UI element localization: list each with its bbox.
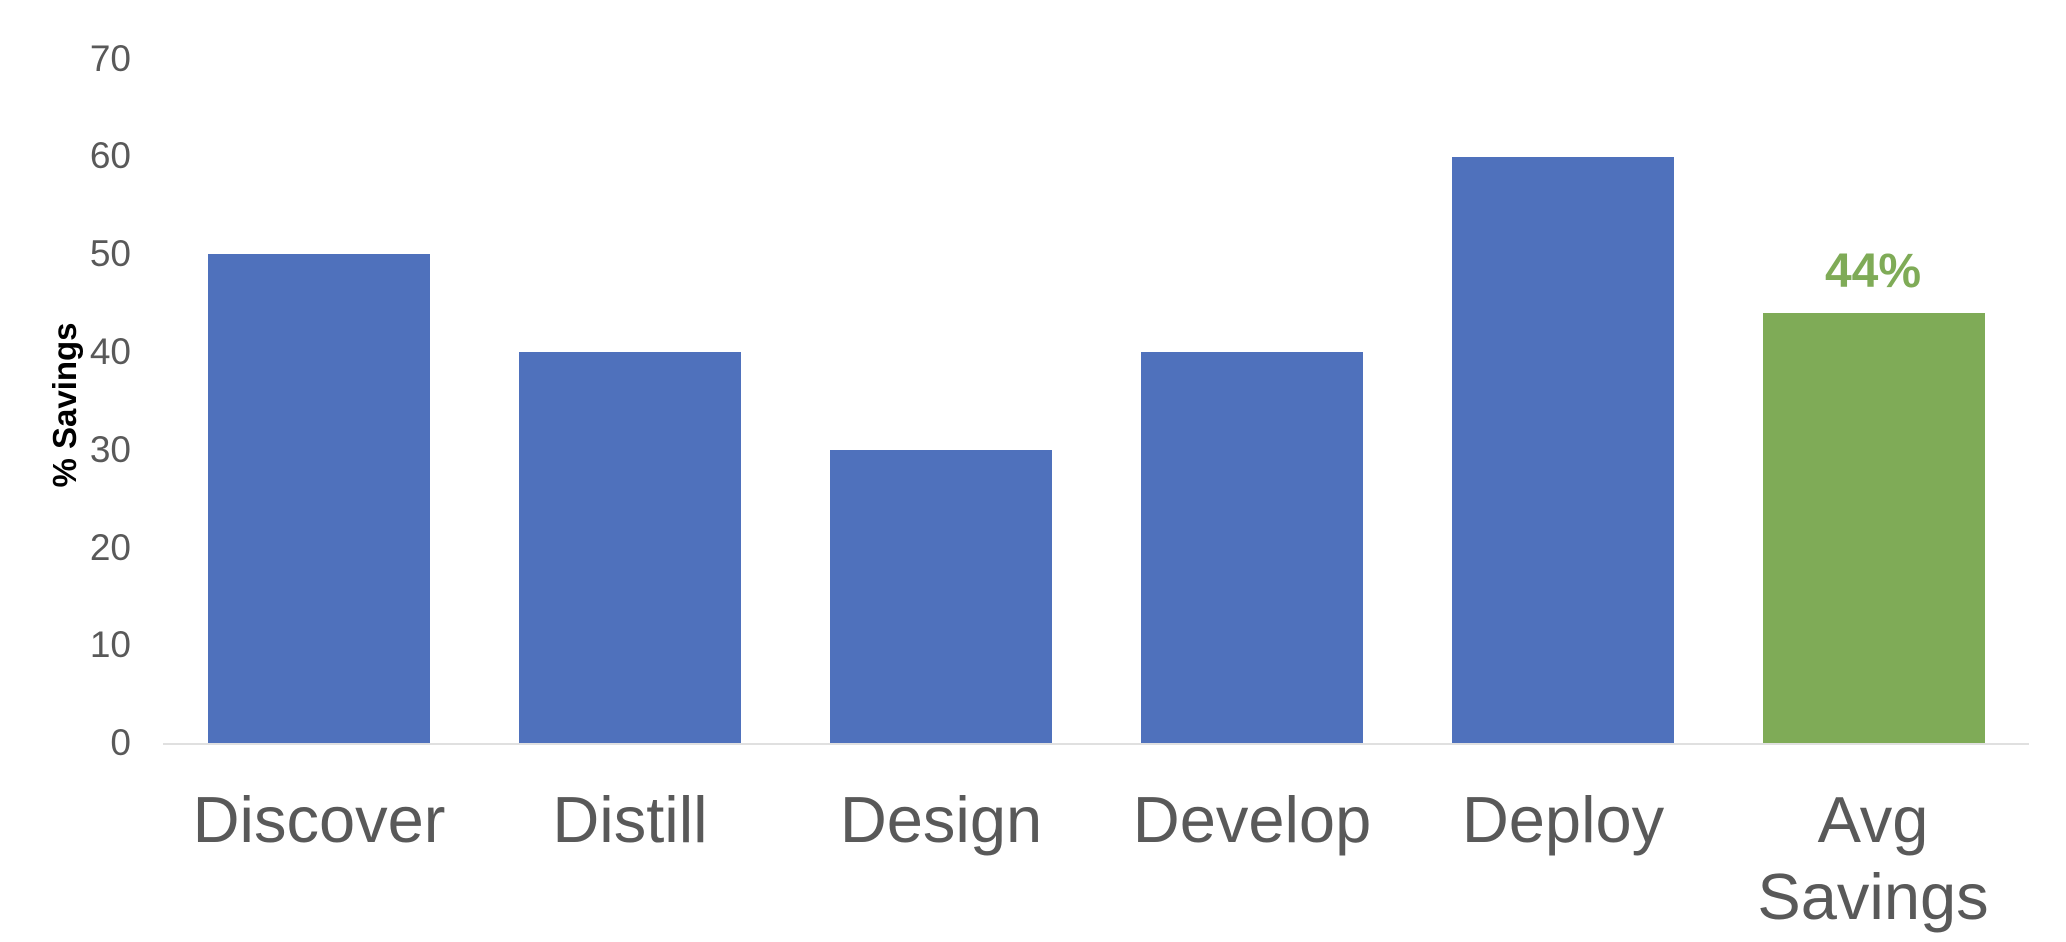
y-axis tick labels: 70 [90, 38, 131, 79]
y-axis title: % Savings [46, 322, 83, 488]
y-axis tick labels: 0 [110, 722, 131, 763]
bar: Deploy [1452, 157, 1674, 743]
bar: Discover [208, 254, 430, 743]
category labels: Discover [193, 783, 445, 856]
bar: Develop [1141, 352, 1363, 743]
bars [208, 157, 1985, 743]
y-axis tick labels: 60 [90, 135, 131, 176]
y-axis tick labels: 30 [90, 429, 131, 470]
category labels [193, 783, 1989, 933]
category labels: Develop [1133, 783, 1371, 856]
bar: Avg Savings [1763, 313, 1985, 743]
y-axis tick labels [90, 38, 131, 763]
x-axis line [163, 743, 2029, 745]
category labels: Avg [1818, 783, 1928, 856]
category labels: Deploy [1462, 783, 1665, 856]
y-axis tick labels: 20 [90, 527, 131, 568]
category labels: Design [840, 783, 1042, 856]
bar: Distill [519, 352, 741, 743]
y-axis tick labels: 40 [90, 331, 131, 372]
average value label: 44% [1825, 245, 1921, 298]
y-axis tick labels: 50 [90, 233, 131, 274]
y-axis tick labels: 10 [90, 624, 131, 665]
category labels: Savings [1757, 860, 1989, 933]
bar: Design [830, 450, 1052, 743]
category labels: Distill [552, 783, 708, 856]
